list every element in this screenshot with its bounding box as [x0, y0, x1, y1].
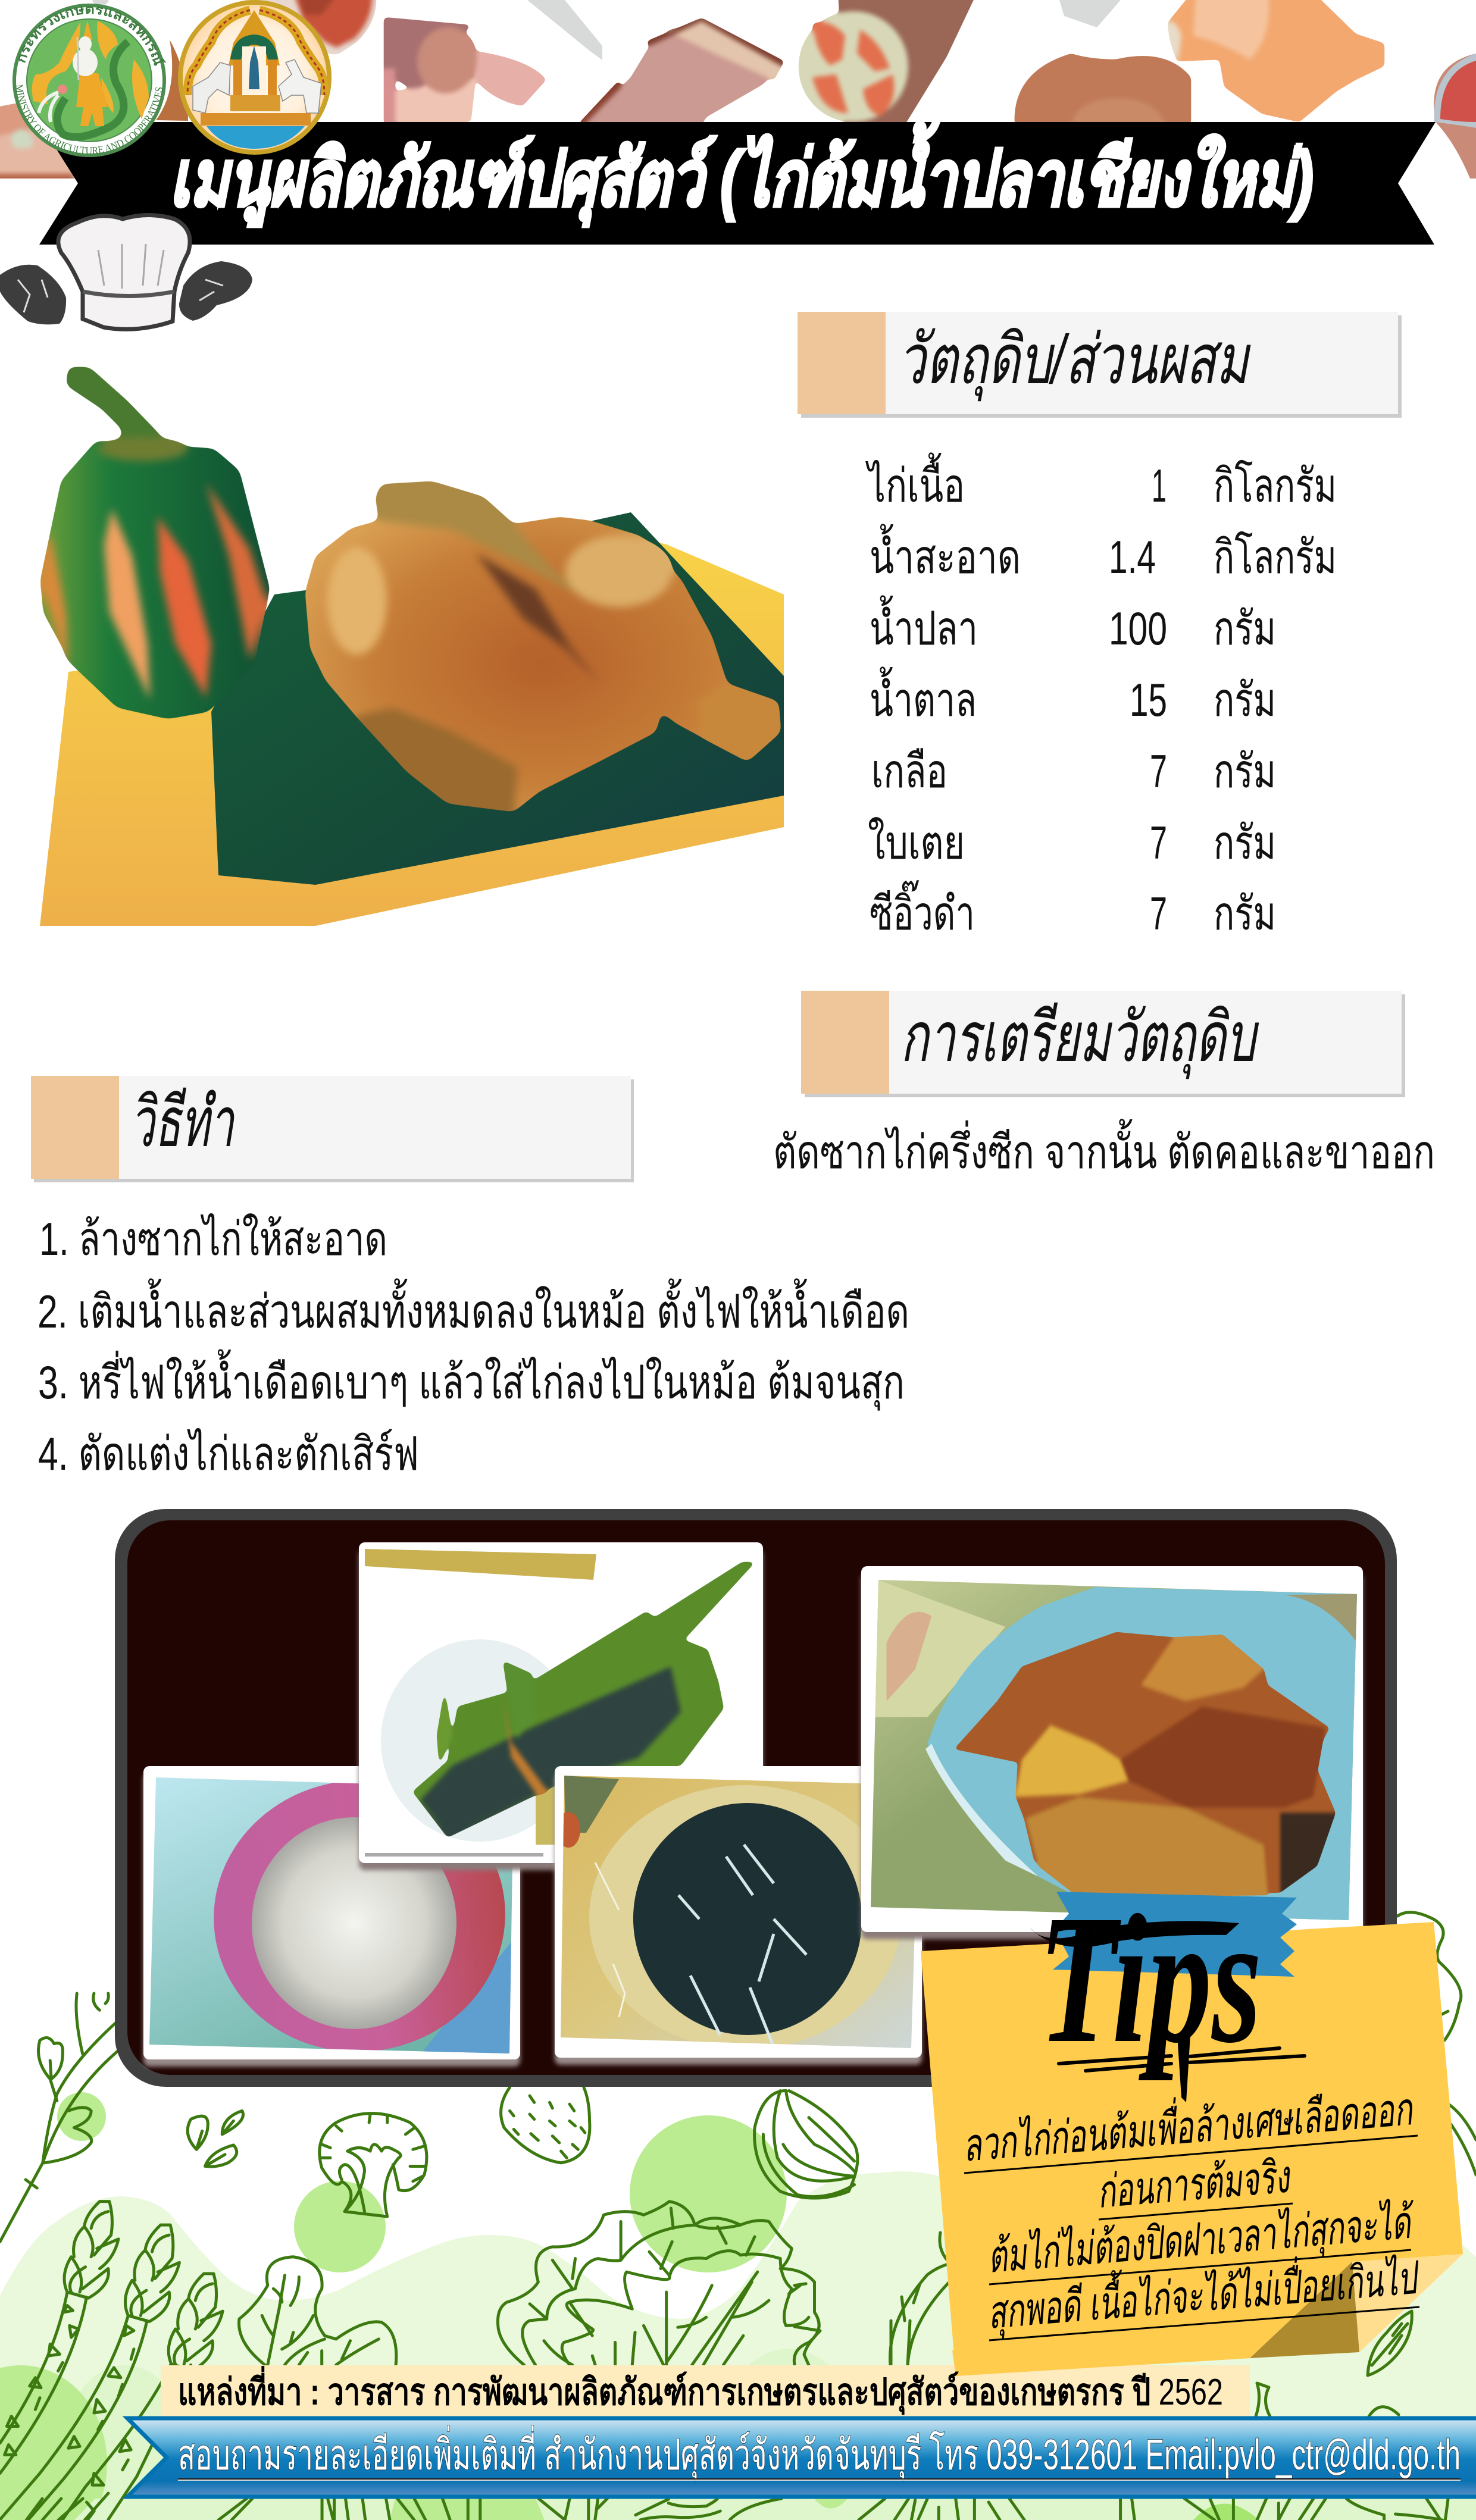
method steps: 1. ล้างซากไก่ให้สะอาด	[39, 1213, 387, 1265]
ingredients table: กรัม	[1214, 745, 1276, 797]
ingredients table: กรัม	[1214, 602, 1276, 655]
ingredients table: ไก่เนื้อ	[865, 452, 965, 512]
heading: ingredients: วัตถุดิบ/ส่วนผสม	[898, 321, 1251, 402]
carved gourd	[40, 367, 270, 719]
photo: cooked chicken pieces	[861, 1566, 1366, 1939]
method steps	[37, 1213, 909, 1480]
source box	[161, 2350, 1250, 2418]
ingredients table: 7	[1150, 745, 1167, 797]
method steps: 4. ตัดแต่งไก่และตักเสิร์ฟ	[38, 1428, 419, 1480]
garden background hills	[0, 2092, 1476, 2520]
mushroom	[320, 2114, 427, 2217]
top meat illustrations	[0, 0, 1476, 180]
blue tape	[1053, 1892, 1297, 1977]
sausage	[1015, 54, 1191, 125]
strawberry	[501, 2087, 590, 2163]
ingredients table: น้ำตาล	[870, 666, 977, 726]
ingredients table: เกลือ	[871, 745, 947, 797]
tips note	[921, 1877, 1463, 2376]
line art vegetables	[0, 1912, 1476, 2520]
ingredients table: ใบเตย	[868, 816, 965, 869]
chicken leg	[1168, 0, 1384, 122]
heading: preparation: การเตรียมวัตถุดิบ	[900, 998, 1259, 1079]
logo: ministry of agriculture	[12, 4, 166, 157]
ingredients table: 7	[1150, 887, 1167, 940]
ingredients table: 7	[1150, 816, 1167, 869]
ham	[577, 18, 784, 125]
heading: preparation	[801, 991, 1405, 1097]
big ham slice	[799, 0, 979, 125]
red meat top	[244, 0, 376, 55]
photo: pandan leaves	[359, 1542, 763, 1870]
vine and leaves	[0, 1993, 858, 2365]
right meat	[1434, 54, 1476, 179]
grey sketches	[527, 0, 602, 60]
right side plant lines	[795, 1912, 1476, 2416]
logo: department of livestock	[180, 2, 329, 152]
ingredients table: 1	[1152, 459, 1167, 512]
salami	[384, 17, 546, 125]
lower strip stems	[26, 2493, 1448, 2520]
ingredients table: ซีอิ๊วดำ	[870, 880, 975, 940]
onion	[755, 2091, 858, 2198]
ingredients table	[865, 452, 1337, 940]
photo: fish sauce in bowl	[554, 1766, 923, 2065]
heading: method	[31, 1076, 634, 1182]
tips title: Tips	[1039, 1877, 1262, 2081]
ingredients table: 100	[1109, 602, 1167, 655]
contact ribbon	[127, 2418, 1476, 2497]
asparagus tips	[0, 2202, 223, 2519]
logo: ministry of agriculture: MINISTRY OF AGRICULTURE AND COOPERATIVES	[15, 84, 162, 155]
spinach	[239, 2257, 396, 2365]
photo panel	[115, 1509, 1397, 2087]
ingredients table: น้ำปลา	[870, 595, 978, 655]
heading: ingredients	[798, 312, 1402, 418]
tips body text	[961, 2077, 1422, 2340]
main dish photo: boiled chicken on banana leaf	[40, 367, 784, 926]
ingredients table: กิโลกรัม	[1214, 531, 1337, 583]
heading: method: วิธีทำ	[130, 1084, 235, 1161]
lettuce	[498, 2202, 819, 2365]
ingredients table: 15	[1130, 674, 1167, 726]
ingredients table: น้ำสะอาด	[870, 524, 1021, 583]
method steps: 3. หรี่ไฟให้น้ำเดือดเบาๆ แล้วใส่ไก่ลงไปในหม้อ ต้มจนสุก	[38, 1349, 905, 1411]
ingredients table: กรัม	[1214, 674, 1276, 726]
chicken	[305, 481, 781, 812]
ingredients table: กรัม	[1214, 816, 1276, 869]
note fold	[1352, 2254, 1463, 2352]
source box: แหล่งที่มา : วารสาร การพัฒนาผลิตภัณฑ์การเกษตรและปศุสัตว์ของเกษตรกร ปี 2562	[178, 2366, 1223, 2415]
photo: sugar in pink bowl	[143, 1766, 524, 2067]
icon: chef hat with meat	[0, 215, 252, 329]
ingredients table: 1.4	[1109, 531, 1156, 583]
ingredients table: กิโลกรัม	[1214, 459, 1337, 512]
left meat fragments	[0, 0, 110, 180]
method steps: 2. เติมน้ำและส่วนผสมทั้งหมดลงในหม้อ ตั้งไฟให้น้ำเดือด	[37, 1278, 909, 1338]
title banner	[39, 122, 1436, 245]
logo: ministry of agriculture: กระทรวงเกษตรและสหกรณ์	[18, 6, 166, 66]
ingredients table: กรัม	[1214, 887, 1276, 940]
tips body text: ก่อนการต้มจริง	[1095, 2152, 1293, 2218]
